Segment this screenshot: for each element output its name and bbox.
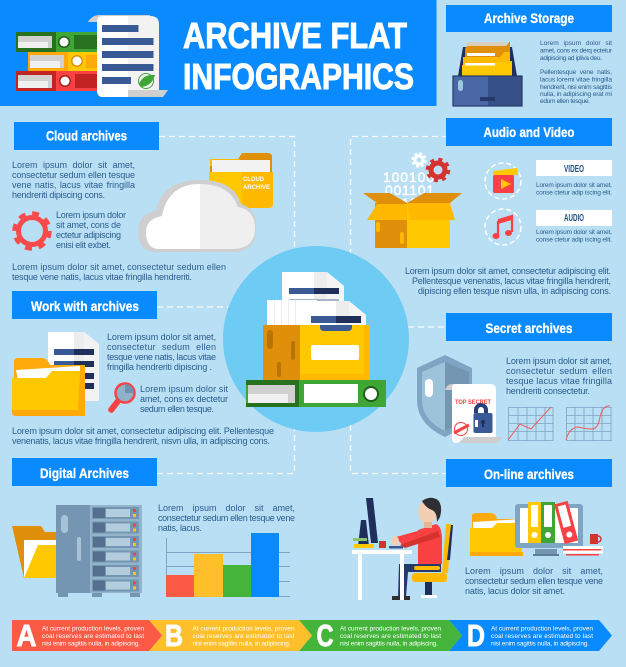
heading: on-line archives bbox=[446, 459, 612, 487]
text block: magnifier note: sedum ellen tesque. bbox=[140, 404, 214, 414]
binary digits bbox=[383, 169, 434, 211]
step D: coal reserves are estimated to last bbox=[491, 633, 593, 640]
text block: work intro: consectetur sedum ellen bbox=[107, 342, 216, 352]
panel: cloud archives bbox=[12, 122, 273, 282]
icon: shield bbox=[417, 355, 472, 437]
step D: D bbox=[467, 618, 485, 653]
text block: digital intro: natis, lacus. bbox=[158, 523, 202, 533]
text block: digital intro: Lorem ipsum dolor sit amet, bbox=[158, 503, 295, 513]
text block: secret bbox=[506, 356, 612, 396]
step D: nisi enim sagittis nulla, in adipiscing. bbox=[491, 640, 589, 648]
title: INFOGRAPHICS bbox=[183, 56, 414, 97]
heading: archive storage bbox=[446, 5, 612, 32]
text block: work intro bbox=[107, 332, 216, 372]
text block: magnifier note bbox=[140, 384, 228, 414]
text block: secret: tesque lacus vitae fringilla bbox=[506, 376, 612, 386]
panel: archive storage bbox=[446, 5, 613, 106]
text block: online: Lorem ipsum dolor sit amet, bbox=[465, 566, 603, 576]
icon: music note bbox=[485, 209, 521, 245]
heading: secret archives bbox=[446, 313, 612, 341]
text block: work footer: venenatis, lacus vitae fringilla hendrerit, nisvn ulla, in adipiscing cons. bbox=[12, 436, 270, 446]
panel: audio and video bbox=[363, 118, 612, 296]
heading: cloud archives: Cloud archives bbox=[46, 128, 127, 144]
text block: video bbox=[536, 182, 612, 196]
panel: digital archives bbox=[12, 458, 295, 597]
text block: storage: Pellentesque vene natis, bbox=[540, 69, 612, 76]
step D bbox=[449, 618, 612, 653]
text block: work intro: fringilla hendreriti dipiscing . bbox=[107, 362, 212, 372]
text block: secret: Lorem ipsum dolor sit amet, bbox=[506, 356, 612, 366]
icon: cloud archive folder: ARCHIVE bbox=[243, 184, 271, 191]
text block: audio footer: Pellentesque venenatis, lacus vitae fringilla hendrerit, bbox=[412, 276, 611, 286]
step B: B bbox=[165, 618, 183, 653]
icon: gears bbox=[412, 154, 448, 180]
text block: magnifier note: Lorem ipsum dolor sit bbox=[140, 384, 228, 394]
binary digits: 100100 bbox=[383, 169, 434, 185]
text block: audio: conse ctetur adip iscing elit. bbox=[536, 236, 612, 244]
line chart: right bbox=[566, 406, 612, 441]
text block: audio footer: Lorem ipsum dolor sit amet, consectetur adipiscing elit. bbox=[405, 266, 611, 276]
text block: video: Lorem ipsum dolor sit amet, bbox=[536, 182, 612, 189]
text block: storage: hendrerit, nisi enim sagittis bbox=[540, 84, 613, 91]
text block: storage: adipiscing ad ipliva deu. bbox=[540, 55, 602, 62]
icon: folder and monitor with binders bbox=[470, 501, 603, 556]
text block: work intro: tesque vene natis, lacus vitae bbox=[107, 352, 216, 362]
panel: on-line archives bbox=[352, 459, 612, 600]
step C: coal reserves are estimated to last bbox=[340, 633, 441, 640]
heading: audio and video bbox=[446, 118, 612, 146]
icon: folder and server rack bbox=[12, 505, 142, 597]
step A: nisi enim sagittis nulla, in adipiscing. bbox=[42, 640, 140, 648]
text block: storage bbox=[540, 40, 613, 105]
step A bbox=[12, 618, 162, 653]
text block: work footer bbox=[12, 426, 274, 446]
title bbox=[183, 15, 414, 97]
icon: cloud bbox=[138, 180, 256, 252]
step A: At current production levels, proven bbox=[42, 626, 144, 632]
text block: cloud intro bbox=[12, 160, 135, 200]
heading: secret archives: Secret archives bbox=[486, 320, 573, 336]
text block: cloud intro: Lorem ipsum dolor sit amet, bbox=[12, 160, 135, 170]
text block: gear note: sit amet, cons de bbox=[56, 220, 121, 230]
text block: digital intro: consectetur sedum ellen tesque vene bbox=[158, 513, 295, 523]
text block: digital intro bbox=[158, 503, 295, 533]
text block: storage: Lorem ipsum dolor sit bbox=[540, 40, 612, 47]
icon: gear bbox=[14, 214, 50, 248]
step D: At current production levels, proven bbox=[491, 626, 593, 632]
text block: audio footer: dipiscing ellen tesque nisvn ulla, in adipiscing cons. bbox=[418, 286, 611, 296]
audio label bbox=[536, 210, 612, 226]
icon: file drawer bbox=[453, 41, 522, 106]
text block: secret: consectetur sedum ellen bbox=[506, 366, 612, 376]
heading: work with archives: Work with archives bbox=[31, 298, 139, 314]
step B: nisi enim sagittis nulla, in adipiscing. bbox=[192, 640, 291, 648]
heading: cloud archives bbox=[14, 122, 159, 150]
text block: work footer: Lorem ipsum dolor sit amet, consectetur adipiscing elit. Pellentesque bbox=[12, 426, 274, 436]
step C: nisi enim sagittis nulla, in adipiscing. bbox=[340, 640, 438, 648]
heading: digital archives: Digital Archives bbox=[40, 465, 129, 481]
panel: work with archives bbox=[12, 291, 274, 446]
line chart: left bbox=[508, 407, 553, 441]
panel: ABCD arrow strip bbox=[12, 618, 612, 653]
icon: top secret document: TOP SECRET bbox=[455, 399, 491, 406]
icon: folders and document bbox=[16, 15, 168, 97]
text block: video: conse ctetur adip iscing elit. bbox=[536, 190, 612, 196]
text block: audio bbox=[536, 229, 612, 244]
title: ARCHIVE FLAT bbox=[183, 15, 407, 56]
icon: magnifier bbox=[107, 384, 134, 414]
text block: cloud intro: vene natis, lacus vitae fringilla bbox=[12, 180, 135, 190]
center circle illustration bbox=[223, 246, 409, 432]
illustration: person at desk bbox=[352, 498, 453, 600]
bar chart bbox=[166, 533, 290, 597]
binary digits: 001101 bbox=[385, 182, 434, 198]
text block: storage: nulla, in adipiscing erat mi bbox=[540, 91, 613, 98]
text block: audio: Lorem ipsum dolor sit amet, bbox=[536, 229, 612, 236]
video label: VIDEO bbox=[564, 164, 584, 175]
text block: work intro: Lorem ipsum dolor sit amet, bbox=[107, 332, 216, 342]
text block: cloud footer: tesque vene natis, lacus vitae fringilla hendreriti. bbox=[12, 272, 192, 282]
text block: gear note: Lorem ipsum dolor bbox=[56, 210, 126, 220]
icon: cloud archive folder: CLOUD bbox=[243, 176, 264, 183]
text block: secret: hendreriti consectetur. bbox=[506, 386, 590, 396]
step A: coal reserves are estimated to last bbox=[42, 633, 144, 640]
text block: storage: edum ellen tesque. bbox=[540, 98, 590, 105]
heading: digital archives bbox=[12, 458, 157, 486]
step B: coal reserves are estimated to last bbox=[192, 633, 295, 640]
text block: gear note: enisi elit exbet. bbox=[56, 240, 111, 250]
step C: At current production levels, proven bbox=[340, 626, 441, 632]
step C: C bbox=[316, 618, 334, 653]
step B: At current production levels, proven bbox=[192, 626, 295, 632]
text block: storage: lacus loremi vitae fringilla bbox=[540, 76, 612, 84]
heading: on-line archives: On-line archives bbox=[484, 466, 574, 482]
text block: gear note: ectetur adipiscing bbox=[56, 230, 121, 240]
header banner bbox=[0, 0, 436, 106]
icon: top secret document bbox=[445, 384, 502, 443]
text block: online: consectetur sedum ellen tesque vene bbox=[465, 576, 603, 586]
video label bbox=[536, 160, 612, 176]
icon: video clapper bbox=[485, 163, 521, 199]
step C bbox=[299, 618, 462, 653]
text block: storage: amet, cons ex derq ectetur bbox=[540, 48, 613, 54]
text block: cloud intro: hendreriti dipiscing cons. bbox=[12, 190, 105, 200]
text block: magnifier note: amet, cons ex dectetur bbox=[140, 394, 228, 404]
icon: document and folder bbox=[12, 332, 99, 416]
step A: A bbox=[16, 618, 36, 653]
step B bbox=[149, 618, 312, 653]
icon: open box bbox=[363, 193, 462, 248]
text block: cloud footer: Lorem ipsum dolor sit amet, consectetur sedum ellen bbox=[12, 262, 226, 272]
audio label: AUDIO bbox=[564, 213, 584, 224]
panel: secret archives bbox=[417, 313, 612, 443]
heading: archive storage: Archive Storage bbox=[484, 10, 574, 26]
text block: audio footer bbox=[405, 266, 611, 296]
text block: cloud intro: consectetur sedum ellen tesque bbox=[12, 170, 135, 180]
heading: audio and video: Audio and Video bbox=[484, 124, 574, 140]
binary digits: 101001 bbox=[385, 195, 434, 211]
heading: work with archives bbox=[12, 291, 157, 319]
text block: cloud footer bbox=[12, 262, 226, 282]
text block: online: natis, lacus dolor sit amet. bbox=[465, 586, 565, 596]
text block: online bbox=[465, 566, 603, 596]
icon: cloud archive folder bbox=[209, 153, 273, 208]
text block: gear note bbox=[56, 210, 126, 250]
